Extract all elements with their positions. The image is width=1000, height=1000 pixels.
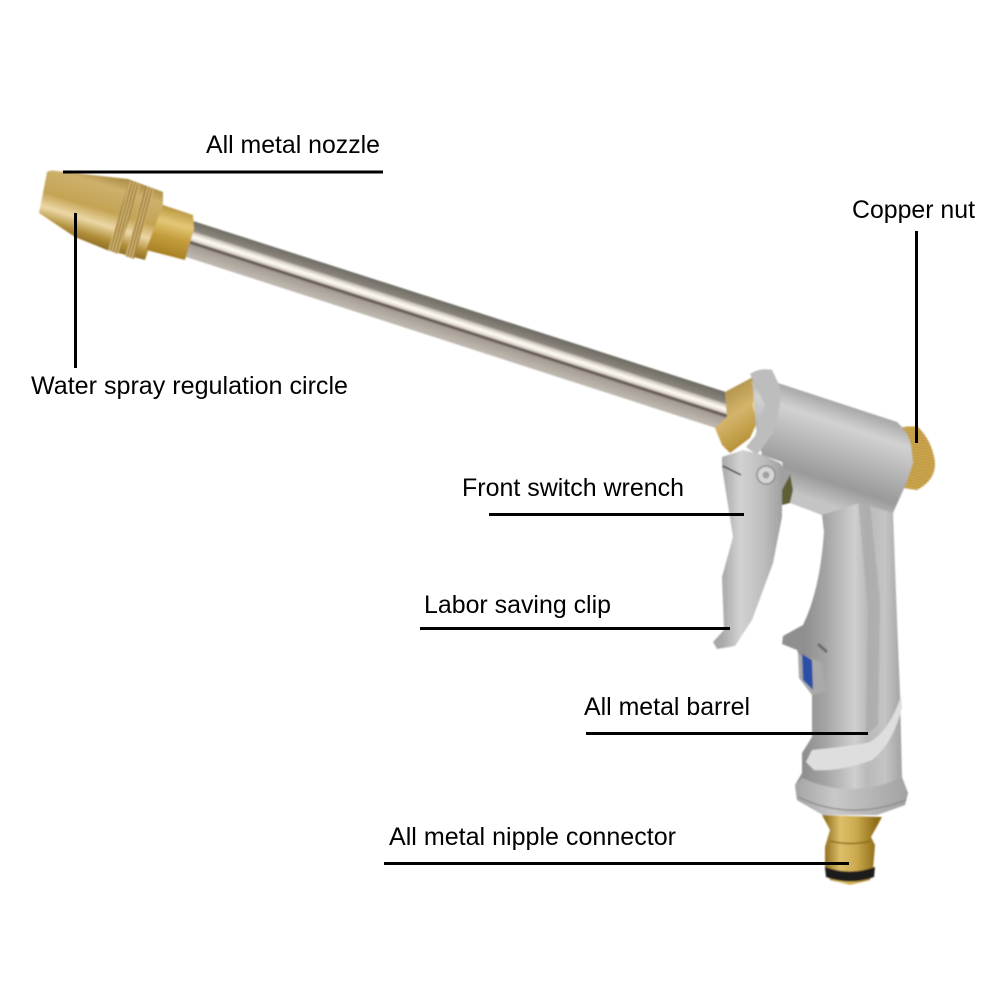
trigger pivot (757, 466, 775, 484)
callout: water spray regulation circle: Water spray regulation circle (31, 372, 348, 400)
callout: all metal nozzle: All metal nozzle (206, 131, 380, 159)
callout: water spray regulation circle (31, 213, 348, 400)
knurled rings (107, 179, 163, 260)
callout: all metal nipple connector (384, 823, 849, 865)
callout: labor saving clip: Labor saving clip (424, 591, 611, 619)
water spray regulation circle (39, 171, 136, 252)
spray gun illustration (39, 171, 935, 885)
metal tube (183, 220, 735, 430)
callout: all metal nipple connector: All metal nipple connector (389, 823, 676, 851)
callout: all metal barrel (584, 693, 868, 735)
grip ridge (858, 500, 880, 735)
collar rim (746, 370, 780, 455)
callout: front switch wrench: Front switch wrench (462, 474, 684, 502)
nozzle neck (146, 205, 194, 260)
front switch wrench (713, 450, 790, 649)
brass hex collar (715, 377, 765, 453)
gun body (752, 369, 913, 515)
copper nut (898, 426, 935, 490)
base flange (795, 778, 908, 815)
rubber o-ring (825, 867, 875, 882)
callout: all metal nozzle (63, 131, 383, 174)
grip and barrel (782, 480, 908, 815)
callout: copper nut (852, 196, 975, 443)
brass connector (822, 815, 882, 885)
callout: front switch wrench (462, 474, 744, 516)
callout: labor saving clip (420, 591, 730, 630)
callout: copper nut: Copper nut (852, 196, 975, 224)
barrel highlight band (806, 696, 902, 770)
blue switch (798, 644, 827, 695)
brass nozzle (39, 171, 194, 260)
connector shadow groove (830, 841, 871, 844)
trigger pivot shadow (778, 473, 793, 505)
callout: all metal barrel: All metal barrel (584, 693, 750, 721)
